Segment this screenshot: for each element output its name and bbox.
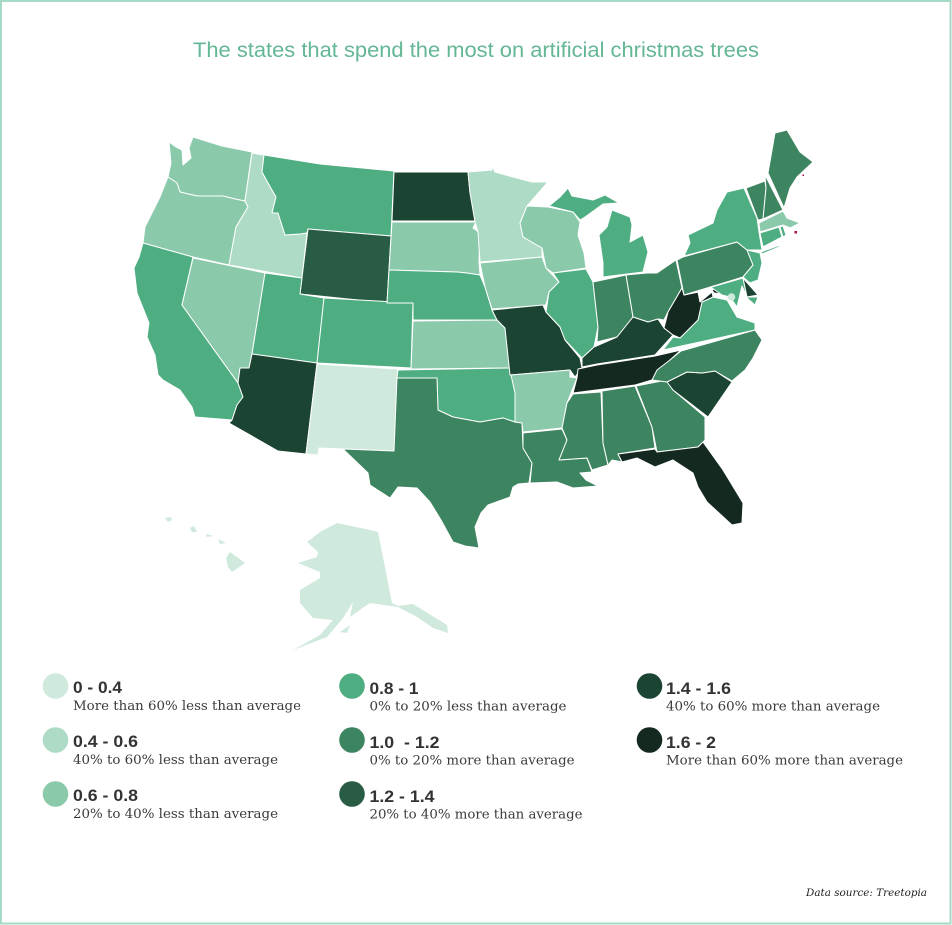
marker: red speck Nantucket [794,231,797,234]
legend item: 0.8 - 1: 0% to 20% less than average [370,700,567,714]
state: Arkansas [511,370,577,432]
state: Oklahoma [397,368,515,422]
state: South Carolina [667,371,732,417]
state: Indiana [593,275,633,342]
legend item: 1.6 - 2 [637,727,903,768]
legend item: 0.4 - 0.6: 40% to 60% less than average [73,753,278,768]
legend item: 0.6 - 0.8: 20% to 40% less than average [73,807,278,822]
legend item: 1.4 - 1.6 [637,673,880,714]
state: New Mexico [306,364,398,455]
legend item: 1.4 - 1.6: 40% to 60% more than average [666,700,880,714]
state: Washington [168,137,252,201]
state: Wisconsin [520,206,586,273]
state: New Jersey [743,250,762,283]
state: Missouri [492,305,582,377]
state: Alaska [293,523,448,650]
state: Wyoming [300,229,391,303]
state: Maryland [684,278,758,307]
state: California [134,243,243,420]
state: Oregon [143,177,248,265]
legend item: 0.8 - 1 [339,673,567,714]
state: Florida [618,442,743,525]
state: Nebraska [387,270,497,320]
state: Maine [768,130,813,208]
legend item: 0.4 - 0.6: 0.4 - 0.6 [73,733,138,751]
state: South Dakota [389,222,480,275]
state: Montana [262,155,394,236]
state: New York [684,188,762,256]
state: Hawaii Molokai [206,534,213,537]
legend item: 1.0 - 1.2: 1.0 - 1.2 [370,734,440,752]
state: Louisiana [523,429,598,488]
marker: red speck Maine island [802,174,804,176]
state: Delaware [743,278,758,297]
state: West Virginia [664,288,713,338]
state: Tennessee [573,350,681,393]
state: Ohio [626,260,682,322]
state: Connecticut [760,227,782,247]
marker: District of Columbia [728,293,735,301]
state: Michigan lower peninsula [599,210,648,277]
legend item: 0.8 - 1: 0.8 - 1 [370,680,418,698]
state: Illinois [546,269,598,358]
legend item: 1.0 - 1.2: 0% to 20% more than average [370,754,575,768]
state: North Carolina [652,330,762,382]
legend item: 0.4 - 0.6 [43,727,278,768]
data source note: Data source: Treetopia [805,888,927,899]
state: Virginia [663,297,755,350]
state: Pennsylvania [677,242,753,295]
state: Alabama [602,386,655,465]
legend item: 1.6 - 2: More than 60% more than average [666,754,903,768]
state: Texas [343,378,532,548]
state: Minnesota [468,165,548,262]
state: Mississippi [559,392,608,470]
legend item: 0.6 - 0.8 [43,781,278,822]
state: Kansas [411,320,510,369]
state: Michigan upper peninsula [549,188,619,220]
state: New York Long Island [761,245,780,254]
state: Kentucky [582,317,673,367]
legend item: 0.6 - 0.8: 0.6 - 0.8 [73,787,138,805]
state: Hawaii Oahu [190,526,197,532]
state: Hawaii Maui [218,539,226,544]
state: West Virginia panhandle [712,288,721,294]
title: The states that spend the most on artificial christmas trees [193,38,759,62]
state: Rhode Island [780,226,786,237]
state: New Hampshire [763,175,783,219]
legend item: 1.2 - 1.4 [339,781,583,822]
state: Utah [252,273,324,363]
state: Nevada [182,258,265,383]
legend item: 1.0 - 1.2 [339,727,575,768]
legend item: 1.2 - 1.4: 20% to 40% more than average [370,808,583,822]
state: Georgia [636,380,705,452]
state: Massachusetts [759,211,800,232]
legend item: 0 - 0.4: More than 60% less than average [73,699,301,714]
state: Idaho [229,153,307,278]
state: Iowa [480,257,559,309]
state: Hawaii Kauai [165,517,172,522]
choropleth map of the United States [134,130,813,650]
state: Arizona [229,354,317,454]
legend item: 1.6 - 2: 1.6 - 2 [666,734,716,752]
legend item: 0 - 0.4 [43,673,301,714]
legend [43,673,903,822]
state: North Dakota [392,172,477,221]
legend item: 0 - 0.4: 0 - 0.4 [73,679,123,697]
state: Alaska Kodiak island [340,625,350,633]
legend item: 1.2 - 1.4: 1.2 - 1.4 [370,788,435,806]
state: Hawaii big island [226,552,245,572]
state: Colorado [317,298,413,368]
legend item: 1.4 - 1.6: 1.4 - 1.6 [666,680,731,698]
state: Vermont [746,181,766,220]
